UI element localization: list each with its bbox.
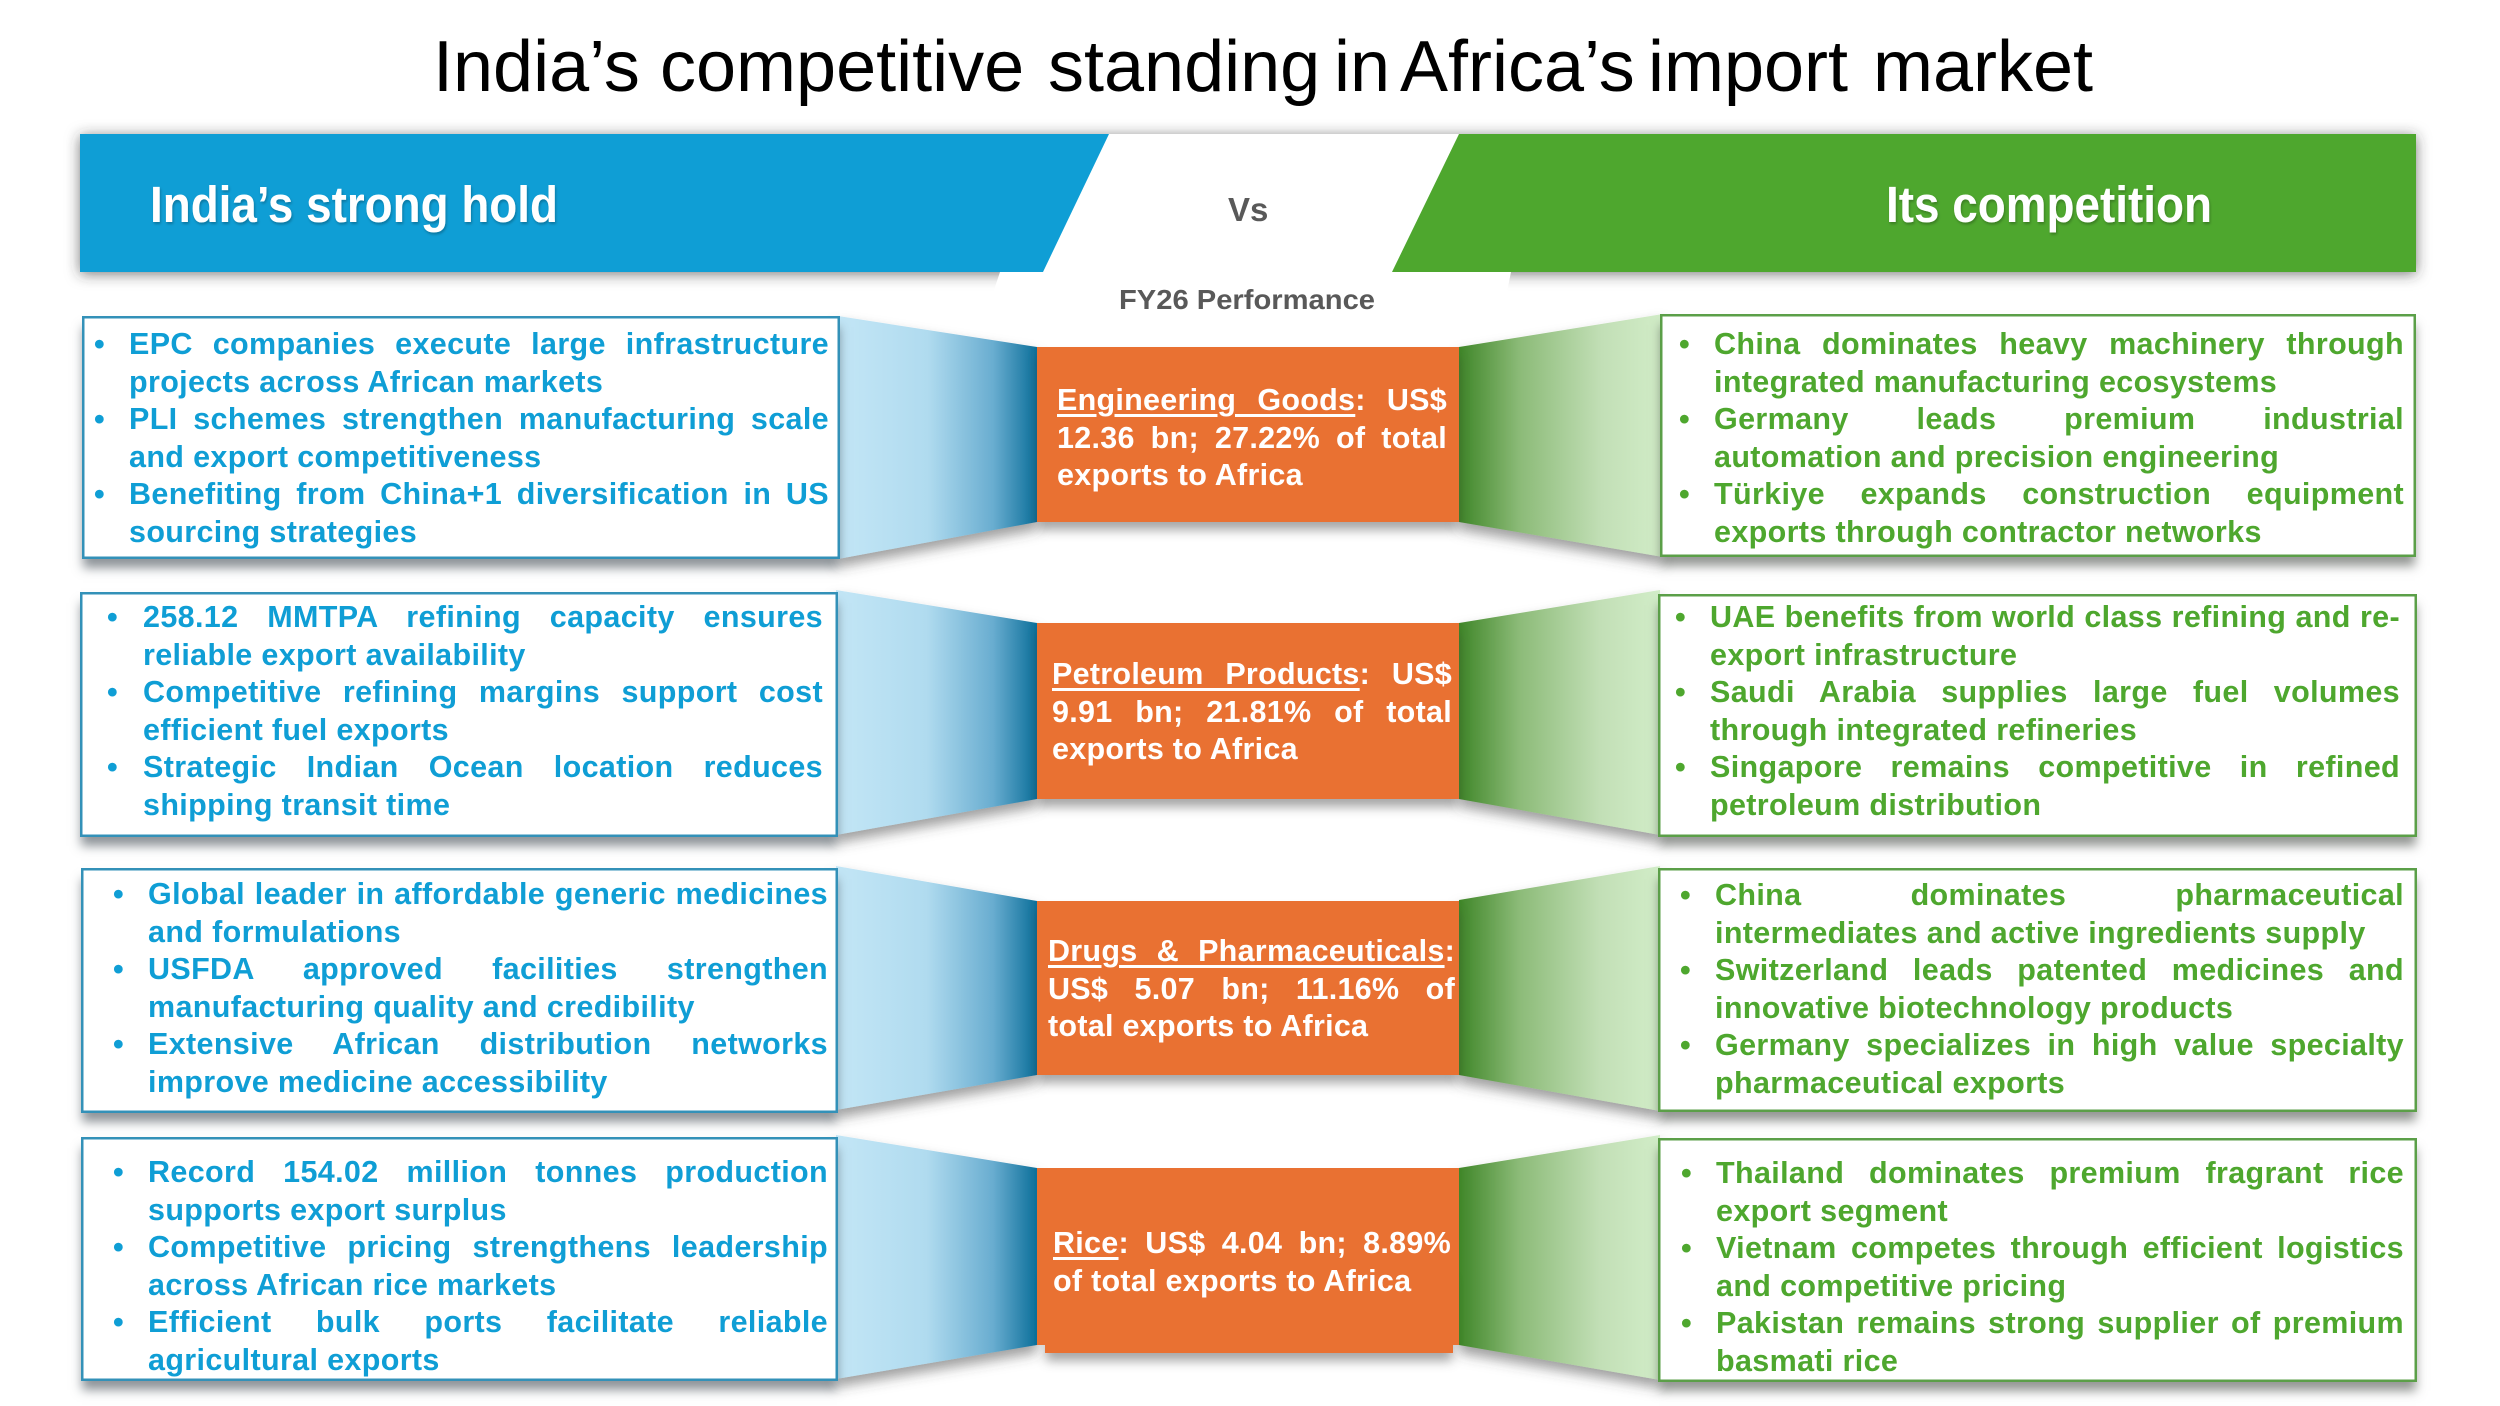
bullet: Germany specialty: Germany specializes in high value specialty bbox=[1715, 1028, 2404, 1062]
bullet: Indian Ocean: shipping transit time bbox=[143, 788, 450, 822]
bullet: refining margins: efficient fuel exports bbox=[143, 713, 449, 747]
panel: India petroleum strengths: • bbox=[107, 750, 118, 784]
connector: engineering left bbox=[838, 316, 1037, 559]
title: market bbox=[1873, 27, 2093, 107]
bullet: China intermediates: intermediates and active ingredients supply bbox=[1715, 916, 2366, 950]
bullet: China+1: sourcing strategies bbox=[129, 515, 417, 549]
title: standing bbox=[1048, 27, 1320, 107]
bullet: Indian Ocean: Strategic Indian Ocean location reduces bbox=[143, 750, 823, 784]
bullet: Thailand bbox=[1681, 1156, 2404, 1228]
bullet: bulk ports: agricultural exports bbox=[148, 1343, 440, 1377]
header: Its competition bbox=[1392, 134, 2416, 272]
bullet: competitive pricing: Competitive pricing strengthens leadership bbox=[148, 1230, 828, 1264]
title: competitive bbox=[660, 27, 1024, 107]
bullet: Switzerland: innovative biotechnology products bbox=[1715, 991, 2233, 1025]
bullet: refining capacity: 258.12 MMTPA refining capacity ensures bbox=[143, 600, 823, 634]
bullet: Germany automation: automation and precision engineering bbox=[1714, 440, 2279, 474]
bullet: Thailand: export segment bbox=[1716, 1194, 1948, 1228]
panel: drugs and pharmaceuticals performance: total exports to Africa bbox=[1048, 1009, 1368, 1043]
subtitle: FY26 Performance: FY26 Performance bbox=[1119, 284, 1375, 315]
bullet: Singapore bbox=[1675, 750, 2400, 822]
bullet: Germany specialty: pharmaceutical exports bbox=[1715, 1066, 2065, 1100]
bullet: competitive pricing bbox=[113, 1230, 828, 1302]
title: in bbox=[1334, 27, 1390, 107]
panel: competition engineering: • bbox=[1679, 402, 1690, 436]
panel: India rice strengths bbox=[81, 1137, 838, 1381]
connector: rice left bbox=[836, 1135, 1037, 1379]
title: import bbox=[1648, 27, 1848, 107]
header: India's strong hold: India’s strong hold bbox=[150, 176, 558, 233]
panel: competition petroleum bbox=[1658, 594, 2417, 837]
bullet: record production bbox=[113, 1155, 828, 1227]
title: Africa’s bbox=[1400, 27, 1635, 107]
connector: pharma left bbox=[836, 866, 1037, 1110]
panel: competition engineering bbox=[1660, 314, 2416, 557]
bullet: generic medicines: Global leader in affordable generic medicines bbox=[148, 877, 828, 911]
bullet: Vietnam bbox=[1681, 1231, 2404, 1303]
header: Its competition: Its competition bbox=[1886, 176, 2212, 233]
panel: petroleum products performance: 9.91 bn; 21.81% of total bbox=[1052, 694, 1452, 728]
panel: India pharma strengths: • bbox=[113, 952, 124, 986]
panel: engineering goods performance bbox=[1037, 347, 1459, 522]
panel: competition engineering: • bbox=[1679, 327, 1690, 361]
bullet: Vietnam: Vietnam competes through efficient logistics bbox=[1716, 1231, 2404, 1265]
bullet: UAE: UAE benefits from world class refining and re- bbox=[1710, 600, 2400, 634]
bullet: Thailand: Thailand dominates premium fragrant rice bbox=[1716, 1156, 2404, 1190]
bullet: Switzerland: Switzerland leads patented medicines and bbox=[1715, 953, 2404, 987]
panel: competition petroleum: • bbox=[1675, 750, 1686, 784]
bullet: PLI schemes: PLI schemes strengthen manufacturing scale bbox=[129, 402, 829, 436]
connector: petroleum right bbox=[1459, 590, 1660, 835]
bullet: refining margins bbox=[107, 675, 823, 747]
panel: India rice strengths: • bbox=[113, 1230, 124, 1264]
bullet: bulk ports bbox=[113, 1305, 828, 1377]
bullet: Saudi Arabia: Saudi Arabia supplies large fuel volumes bbox=[1710, 675, 2400, 709]
bullet: distribution bbox=[113, 1027, 828, 1099]
connector: rice right bbox=[1459, 1135, 1660, 1380]
bullet: Pakistan: Pakistan remains strong supplier of premium bbox=[1716, 1306, 2404, 1340]
bullet: China machinery: China dominates heavy machinery through bbox=[1714, 327, 2404, 361]
bullet: USFDA: manufacturing quality and credibility bbox=[148, 990, 695, 1024]
bullet: distribution: Extensive African distribution networks bbox=[148, 1027, 828, 1061]
connector: petroleum left bbox=[836, 590, 1037, 835]
label: Vs: Vs bbox=[1228, 191, 1268, 228]
panel: rice performance: of total exports to Africa bbox=[1053, 1264, 1411, 1298]
bullet: Singapore: petroleum distribution bbox=[1710, 788, 2041, 822]
panel: rice performance bbox=[1037, 1168, 1459, 1368]
panel: competition rice: • bbox=[1681, 1156, 1692, 1190]
panel: competition pharma bbox=[1658, 868, 2417, 1112]
panel: competition pharma: • bbox=[1680, 953, 1691, 987]
bullet: USFDA: USFDA approved facilities strengthen bbox=[148, 952, 828, 986]
bullet: Switzerland bbox=[1680, 953, 2404, 1025]
bullet: bulk ports: Efficient bulk ports facilitate reliable bbox=[148, 1305, 828, 1339]
bullet: competitive pricing: across African rice markets bbox=[148, 1268, 556, 1302]
bullet: refining capacity: reliable export availability bbox=[143, 638, 526, 672]
panel: India pharma strengths: • bbox=[113, 877, 124, 911]
bullet: EPC companies: EPC companies execute large infrastructure bbox=[129, 327, 829, 361]
panel: India pharma strengths: • bbox=[113, 1027, 124, 1061]
header: India's strong hold bbox=[80, 134, 1109, 272]
panel: India petroleum strengths bbox=[80, 592, 838, 837]
bullet: China+1: Benefiting from China+1 diversification in US bbox=[129, 477, 829, 511]
bullet: distribution: improve medicine accessibility bbox=[148, 1065, 608, 1099]
panel: petroleum products performance: exports to Africa bbox=[1052, 732, 1298, 766]
bullet: PLI schemes bbox=[94, 402, 829, 474]
panel: engineering goods performance: Engineering Goods: US$ bbox=[1057, 383, 1447, 417]
panel: engineering goods performance: 12.36 bn; 27.22% of total bbox=[1057, 420, 1447, 454]
bullet: China intermediates bbox=[1680, 878, 2404, 950]
header banner bbox=[80, 134, 2416, 302]
panel: India petroleum strengths: • bbox=[107, 600, 118, 634]
panel: India engineering strengths: • bbox=[94, 402, 105, 436]
panel: competition pharma: • bbox=[1680, 1028, 1691, 1062]
bullet: Vietnam: and competitive pricing bbox=[1716, 1269, 2066, 1303]
bullet: generic medicines bbox=[113, 877, 828, 949]
bullet: generic medicines: and formulations bbox=[148, 915, 401, 949]
panel: petroleum products performance: Petroleum Products: US$ bbox=[1052, 657, 1452, 691]
bullet: Germany specialty bbox=[1680, 1028, 2404, 1100]
bullet: PLI schemes: and export competitiveness bbox=[129, 440, 542, 474]
panel: competition pharma: • bbox=[1680, 878, 1691, 912]
bullet: Pakistan bbox=[1681, 1306, 2404, 1378]
bullet: Singapore: Singapore remains competitive in refined bbox=[1710, 750, 2400, 784]
panel: drugs and pharmaceuticals performance: US$ 5.07 bn; 11.16% of bbox=[1048, 972, 1455, 1006]
bullet: Saudi Arabia bbox=[1675, 675, 2400, 747]
panel: drugs and pharmaceuticals performance: Drugs & Pharmaceuticals: bbox=[1048, 934, 1455, 968]
bullet: refining capacity bbox=[107, 600, 823, 672]
panel: competition petroleum: • bbox=[1675, 675, 1686, 709]
panel: engineering goods performance: exports to Africa bbox=[1057, 458, 1303, 492]
title: India’s bbox=[433, 27, 640, 107]
bullet: China+1 bbox=[94, 477, 829, 549]
panel: India rice strengths: • bbox=[113, 1305, 124, 1339]
bullet: Germany automation bbox=[1679, 402, 2404, 474]
connector: engineering right bbox=[1459, 314, 1663, 557]
bullet: UAE: export infrastructure bbox=[1710, 638, 2017, 672]
bullet: record production: Record 154.02 million tonnes production bbox=[148, 1155, 828, 1189]
bullet: refining margins: Competitive refining margins support cost bbox=[143, 675, 823, 709]
bullet: record production: supports export surplus bbox=[148, 1193, 507, 1227]
bullet: Türkiye equipment: Türkiye expands construction equipment bbox=[1714, 477, 2404, 511]
bullet: China machinery bbox=[1679, 327, 2404, 399]
connector: pharma right bbox=[1459, 866, 1660, 1111]
bullet: Pakistan: basmati rice bbox=[1716, 1344, 1898, 1378]
panel: competition rice: • bbox=[1681, 1306, 1692, 1340]
panel: India engineering strengths: • bbox=[94, 327, 105, 361]
panel: India rice strengths: • bbox=[113, 1155, 124, 1189]
bullet: China machinery: integrated manufacturing ecosystems bbox=[1714, 365, 2277, 399]
bullet: EPC companies: projects across African markets bbox=[129, 365, 603, 399]
panel: India engineering strengths: • bbox=[94, 477, 105, 511]
panel: competition rice: • bbox=[1681, 1231, 1692, 1265]
panel: petroleum products performance bbox=[1037, 623, 1459, 799]
bullet: Saudi Arabia: through integrated refineries bbox=[1710, 713, 2137, 747]
bullet: UAE bbox=[1675, 600, 2400, 672]
bullet: USFDA bbox=[113, 952, 828, 1024]
bullet: China intermediates: China dominates pharmaceutical bbox=[1715, 878, 2404, 912]
panel: drugs and pharmaceuticals performance bbox=[1037, 901, 1459, 1075]
panel: competition rice bbox=[1658, 1138, 2417, 1382]
panel: competition engineering: • bbox=[1679, 477, 1690, 511]
bullet: Türkiye equipment bbox=[1679, 477, 2404, 549]
panel: India pharma strengths bbox=[81, 868, 838, 1113]
panel: rice performance: Rice: US$ 4.04 bn; 8.89% bbox=[1053, 1226, 1451, 1260]
bullet: Germany automation: Germany leads premium industrial bbox=[1714, 402, 2404, 436]
bullet: Türkiye equipment: exports through contractor networks bbox=[1714, 515, 2262, 549]
panel: India engineering strengths bbox=[82, 316, 840, 559]
panel: India petroleum strengths: • bbox=[107, 675, 118, 709]
bullet: Indian Ocean bbox=[107, 750, 823, 822]
bullet: EPC companies bbox=[94, 327, 829, 399]
panel: competition petroleum: • bbox=[1675, 600, 1686, 634]
